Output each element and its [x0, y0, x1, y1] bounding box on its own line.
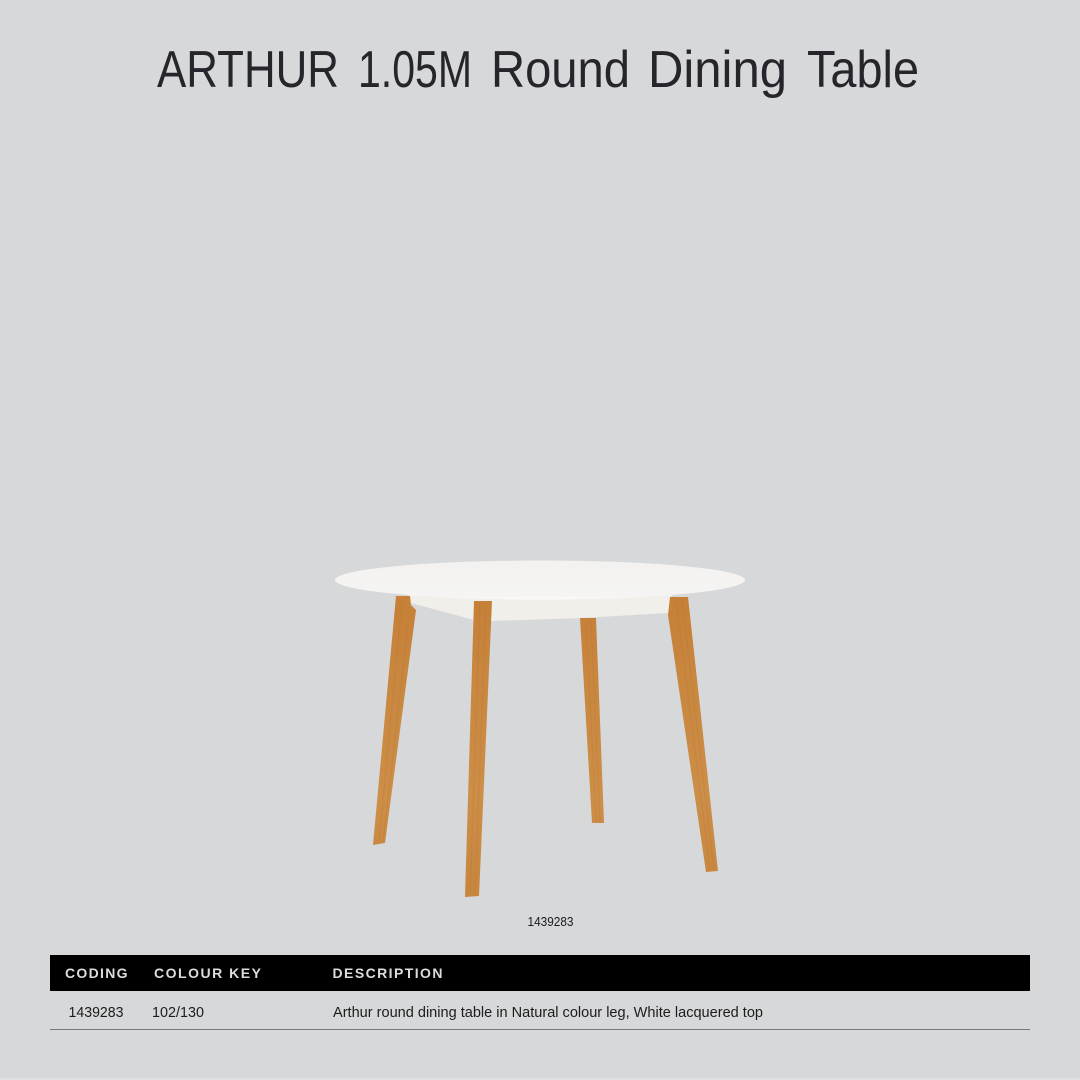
- header: description: DESCRIPTION: [332, 965, 442, 981]
- header: colour key: COLOUR KEY: [154, 965, 262, 981]
- title: Dining: [648, 40, 787, 98]
- table leg: front right: [668, 597, 718, 872]
- table header bar: [50, 955, 1030, 991]
- product code caption: 1439283: [528, 915, 574, 929]
- table leg: front left: [373, 596, 416, 845]
- specification table: [50, 955, 1030, 1030]
- title: ARTHUR: [157, 40, 339, 98]
- title: Round: [491, 40, 630, 98]
- table leg: back: [580, 618, 604, 823]
- table leg: front centre: [465, 601, 492, 897]
- product illustration: round dining table: [335, 560, 745, 897]
- header: coding: CODING: [65, 965, 129, 981]
- table apron: [408, 594, 672, 621]
- title: Table: [807, 40, 919, 98]
- title: [157, 40, 919, 98]
- title: 1.05M: [358, 40, 472, 98]
- cell: description: Arthur round dining table in Natural colour leg, White lacquered top: [333, 1005, 763, 1021]
- table row: [50, 1005, 1030, 1030]
- cell: coding: 1439283: [68, 1005, 124, 1021]
- cell: colour key: 102/130: [152, 1005, 204, 1021]
- table top: [335, 560, 745, 600]
